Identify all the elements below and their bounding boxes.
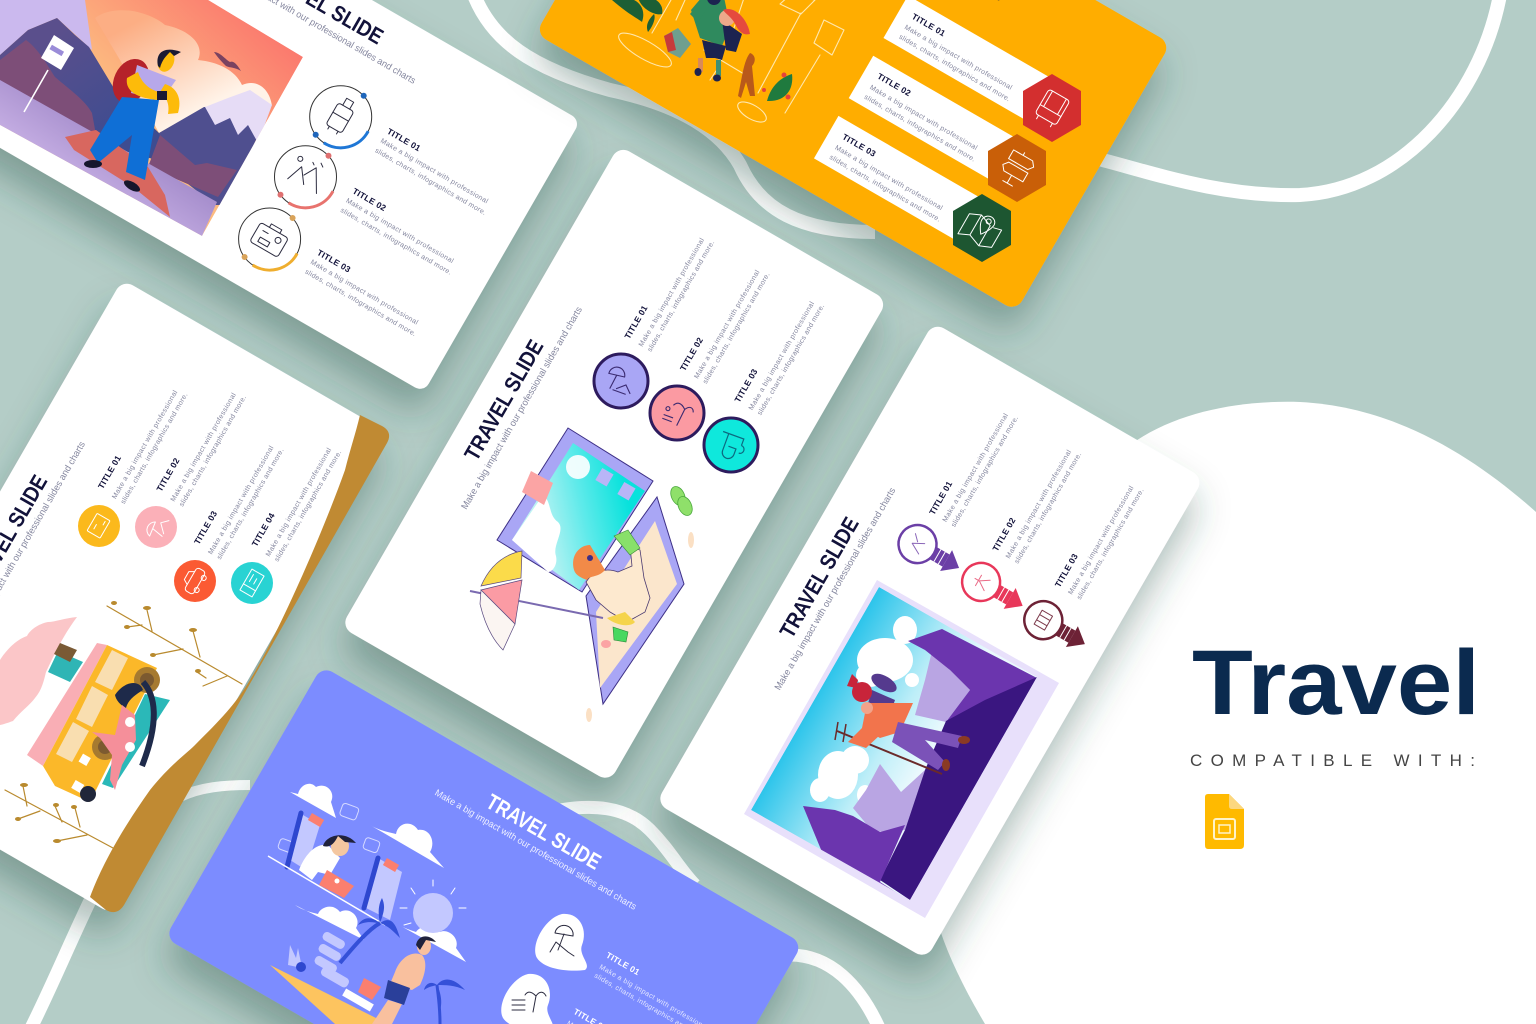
icon: green hexagon map (953, 194, 1011, 262)
item 02 text: Make a big impact with professional (344, 197, 455, 265)
illustration: camper van with sunbather (0, 601, 242, 848)
bar 01: slides, charts, infographics and more. (897, 34, 1011, 103)
icon: orange car circle (174, 560, 216, 602)
slide text and icon circles (0, 322, 343, 759)
item 01 text: slides, charts, infographics and more. (647, 240, 716, 353)
slide card (0, 279, 390, 914)
panel: blue slide, bottom (165, 666, 803, 1024)
item 01 text: TITLE 01 (96, 453, 123, 491)
item 01 text: slides, charts, infographics and more. (373, 147, 487, 217)
item 02 text (339, 185, 465, 277)
item 03 text: Make a big impact with professional (748, 300, 816, 412)
figure: backpacker (84, 48, 181, 194)
white blob backdrop (940, 402, 1536, 1024)
item 01 text: Make a big impact with professional (942, 412, 1010, 523)
item 03 text: TITLE 03 (1053, 552, 1080, 589)
icon: purple lounger circle (594, 354, 648, 408)
subtitle: Make a big impact with our professional slides and charts (433, 788, 638, 913)
bar 02: TITLE 02 (876, 71, 913, 98)
item 03 text: TITLE 03 (192, 509, 219, 546)
subtitle: Make a big impact with our professional slides and charts (459, 305, 585, 511)
item 03 text (191, 433, 286, 561)
bar 02 (849, 56, 1020, 183)
item 01 text (927, 401, 1020, 528)
slide card (165, 666, 803, 1024)
subtitle: Make a big impact with our professional slides and charts (773, 486, 898, 692)
item 02 text (153, 380, 248, 508)
palm trees (340, 898, 465, 1024)
illustration frame (744, 580, 1059, 918)
item 02 text: slides, charts, infographics and more. (339, 207, 453, 277)
brown wave band (90, 415, 389, 912)
heading: TRAVEL SLIDE (775, 513, 864, 642)
icon: pink palm circle (650, 386, 704, 440)
icon: travel case circle (239, 208, 301, 270)
item 01 text: TITLE 01 (385, 126, 423, 153)
illustration: hiker in purple mountains (751, 587, 1037, 900)
caption: compatible with: COMPATIBLE WITH: (1190, 751, 1475, 770)
bar 03: TITLE 03 (841, 132, 878, 159)
slide text and icon circles (103, 0, 542, 338)
figure: beach umbrella (470, 551, 603, 650)
slide text bars (684, 0, 1094, 243)
item 03 text (732, 289, 826, 417)
icon: red hexagon bus (1023, 74, 1081, 142)
icon: suitcase circle (310, 86, 372, 148)
item 01 text (95, 377, 189, 505)
item 03 text (303, 247, 430, 338)
slide text and arrows (749, 365, 1166, 811)
title: Travel: Travel (1192, 632, 1480, 734)
item 04 text: TITLE 04 (250, 511, 277, 548)
illustration: working and relaxing at the beach (268, 784, 466, 1024)
item 02 text: slides, charts, infographics and more. (178, 394, 248, 508)
item 03 text: TITLE 03 (315, 247, 353, 275)
item 02 text: slides, charts, infographics and more. (1014, 451, 1083, 565)
item 03 text: Make a big impact with professional (309, 259, 419, 327)
bar 03: Make a big impact with professional (833, 145, 944, 212)
icon: orange hexagon signpost (988, 134, 1046, 202)
item 02 text: Make a big impact with professional (1005, 449, 1073, 560)
item 02 text (560, 1006, 687, 1024)
icon: white blob with lounger (535, 914, 587, 971)
panel: yellow slide with bus stop (536, 0, 1171, 311)
figure: sunbather (573, 530, 650, 642)
item 01 text: TITLE 01 (604, 950, 642, 977)
item 02 text: TITLE 02 (351, 186, 388, 213)
stacked towels (313, 931, 350, 989)
item 02 text: TITLE 02 (678, 335, 705, 373)
item 02 text: Make a big impact with professional (693, 269, 762, 380)
item 03 text: TITLE 03 (732, 367, 760, 404)
slide card (0, 0, 581, 392)
illustration: beach in open suitcase (470, 428, 695, 722)
slide card (656, 322, 1204, 959)
item 01 text: TITLE 01 (927, 479, 954, 516)
figure: family on bench (664, 0, 750, 82)
heading: TRAVEL SLIDE (459, 335, 548, 465)
panel: van slide, left (0, 279, 390, 914)
icon: mountain circle (274, 146, 336, 208)
small plant and coconut (288, 945, 306, 972)
item 03 text: slides, charts, infographics and more. (757, 303, 826, 417)
item 02 text: TITLE 02 (990, 516, 1018, 553)
heading: TRAVEL SLIDE (482, 789, 605, 875)
arrow marker 03 (1017, 594, 1094, 661)
icon: yellow map circle (78, 505, 120, 547)
item 01 text: TITLE 01 (622, 303, 650, 341)
item 01 text: Make a big impact with professional (638, 237, 706, 348)
item 03 text: slides, charts, infographics and more. (216, 447, 286, 561)
item 01 text (373, 126, 500, 217)
figure: hiker with walking stick (835, 670, 970, 774)
icon: Google Slides (1205, 794, 1244, 849)
item 01 text: Make a big impact with professional (379, 138, 489, 206)
item 04 text: Make a big impact with professional (265, 447, 333, 558)
slide text and icon circles (436, 184, 826, 615)
item 02 text (678, 258, 772, 385)
bar 03: slides, charts, infographics and more. (828, 154, 942, 224)
sun with rays (400, 880, 466, 933)
item 03 text: slides, charts, infographics and more. (303, 268, 417, 338)
item 03 text: Make a big impact with professional (1067, 485, 1136, 596)
bar 01: Make a big impact with professional (903, 24, 1013, 92)
icon: white blob with palm (501, 974, 553, 1024)
slide text (362, 764, 760, 1024)
item 02 text: slides, charts, infographics and more. (702, 272, 772, 385)
item 02 text: Make a big impact with professional (170, 392, 238, 503)
bar 01: TITLE 01 (910, 11, 947, 38)
item 03 text: slides, charts, infographics and more. (1076, 487, 1146, 601)
figure: woman at laptop (299, 835, 356, 898)
beach sand (270, 965, 388, 1024)
bar 02: Make a big impact with professional (868, 84, 979, 152)
bar 03 (814, 116, 986, 243)
item 01 text: Make a big impact with professional (111, 389, 180, 500)
slide card (536, 0, 1171, 311)
bar 02: slides, charts, infographics and more. (863, 94, 976, 163)
item 01 text: slides, charts, infographics and more. (950, 415, 1020, 528)
panel: slide with hiker and mountains, top left (0, 0, 581, 392)
item 03 text: Make a big impact with professional (207, 445, 276, 556)
illustration: family at bus stop (612, 0, 844, 126)
panel: hiker slide, right (656, 322, 1204, 959)
item 01 text (622, 226, 716, 353)
panel: beach suitcase slide, centre (341, 145, 887, 782)
item 02 text: TITLE 02 (154, 456, 182, 493)
slide card (341, 145, 887, 782)
figure: dog (738, 53, 755, 98)
item 04 text (249, 435, 343, 563)
figure: man on beach (342, 936, 436, 1024)
bar 01 (883, 0, 1055, 123)
icon: pink lounger circle (135, 506, 177, 548)
item 03 text (1053, 474, 1146, 601)
icon: cyan snorkel circle (704, 418, 758, 472)
icon: teal ticket circle (231, 562, 273, 604)
item 04 text: slides, charts, infographics and more. (274, 449, 343, 563)
arrow marker 02 (955, 556, 1032, 622)
arrow marker 01 (892, 518, 969, 585)
illustration: traveller at mountain lake (0, 0, 303, 236)
item 01 text: slides, charts, infographics and more. (120, 392, 189, 505)
item 02 text (990, 438, 1083, 565)
